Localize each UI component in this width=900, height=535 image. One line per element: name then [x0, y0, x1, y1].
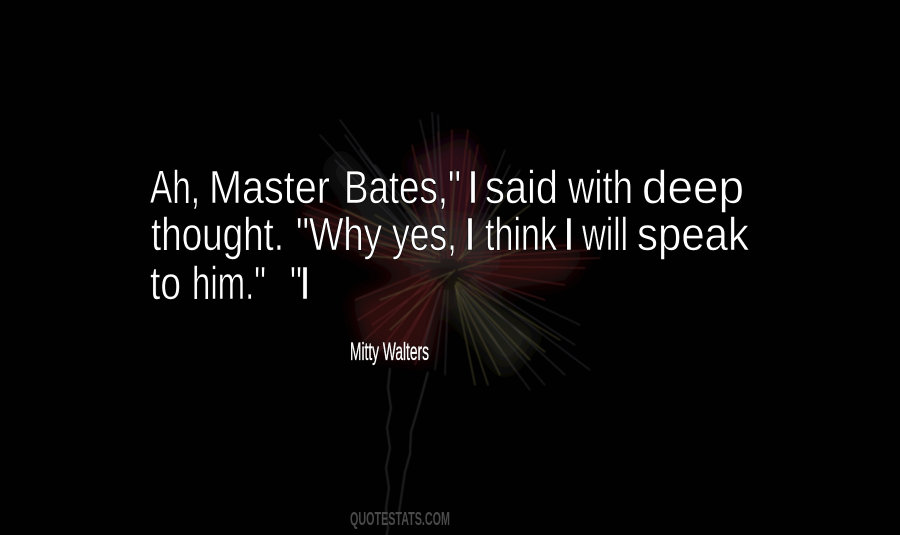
- quote line 2: I: [562, 208, 575, 260]
- quote line 3: ": [290, 257, 302, 309]
- quote line 1: Master: [209, 161, 330, 213]
- quote line 2: [151, 208, 750, 260]
- quote line 1: Bates,": [344, 161, 461, 213]
- quote line 2: think: [485, 208, 558, 260]
- firework burst: [303, 112, 600, 535]
- yellow rays: [345, 165, 560, 385]
- quote line 1: [150, 161, 744, 213]
- quote line 2: "Why: [296, 208, 382, 260]
- quote line 2: I: [464, 208, 476, 260]
- quote line 3: to: [150, 257, 181, 309]
- quote line 2: speak: [637, 208, 750, 260]
- quote line 2: yes,: [392, 208, 457, 260]
- quote line 1: with: [567, 161, 633, 213]
- red rays: [303, 130, 600, 365]
- quote line 3: I: [299, 257, 311, 309]
- quote line 2: thought.: [151, 208, 284, 260]
- quote text: [150, 161, 750, 309]
- quote line 3: [150, 257, 311, 309]
- quote line 1: I: [467, 161, 479, 213]
- quote line 1: Ah,: [150, 161, 200, 213]
- watermark: QUOTESTATS.COM: [350, 509, 450, 529]
- falling trails: [386, 368, 428, 535]
- author name: Mitty Walters: [350, 338, 429, 366]
- grey rays: [320, 112, 590, 390]
- quote line 1: said: [485, 161, 558, 213]
- quote line 1: deep: [642, 161, 744, 213]
- quote line 2: will: [581, 208, 628, 260]
- quote line 3: him.": [192, 257, 266, 309]
